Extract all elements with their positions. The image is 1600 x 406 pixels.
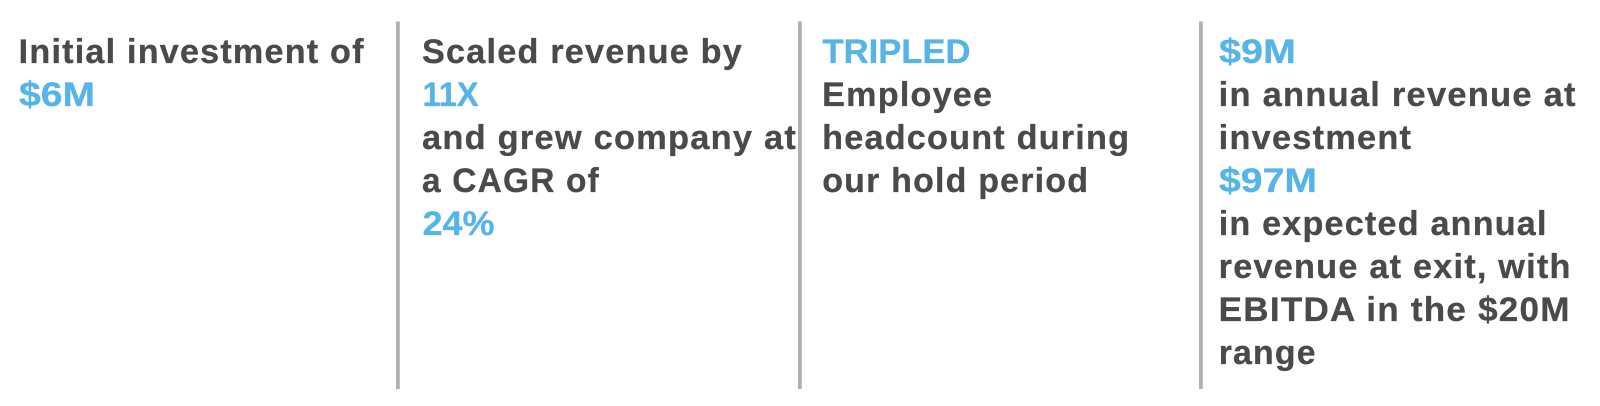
text: expected revenue line 2: revenue at exit, with [1219, 248, 1572, 286]
panel: employee headcount [822, 33, 1130, 200]
text: initial investment label: Initial investment of [19, 33, 365, 71]
text: headcount line 1: Employee [822, 76, 993, 114]
text: revenue at investment line 2: investment [1219, 119, 1412, 157]
stat: 24%: 24% [422, 205, 494, 243]
text: expected revenue line 3: EBITDA in the $20M [1219, 291, 1571, 329]
stat: 11X: 11X [422, 76, 479, 114]
panel: initial investment [19, 33, 365, 114]
stat: $97M: $97M [1219, 162, 1317, 200]
panel: revenue scale [422, 33, 797, 243]
text: revenue at investment line 1: in annual revenue at [1219, 76, 1577, 114]
text: headcount line 2: headcount during [822, 119, 1130, 157]
text: growth label line 2: a CAGR of [422, 162, 600, 200]
text: headcount line 3: our hold period [822, 162, 1089, 200]
stat: tripled: TRIPLED [822, 33, 970, 71]
text: expected revenue line 4: range [1219, 334, 1317, 372]
text: scaled revenue label: Scaled revenue by [422, 33, 743, 71]
text: expected revenue line 1: in expected annual [1219, 205, 1548, 243]
stat: $6M: $6M [19, 76, 95, 114]
text: growth label line 1: and grew company at [422, 119, 797, 157]
stat: $9M: $9M [1219, 33, 1296, 71]
panel: annual revenue [1219, 33, 1577, 372]
